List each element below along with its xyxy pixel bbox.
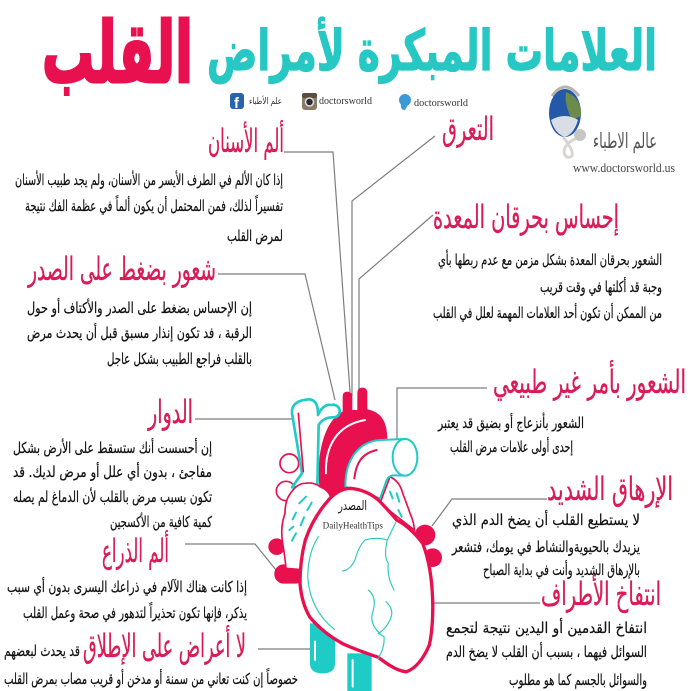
body text [7, 577, 247, 623]
panel: tooth pain [15, 120, 284, 245]
body text: إذا كان الألم في الطرف الأيسر من الأسنان، ولم يجد طبيب الأسنان [15, 170, 283, 190]
right atrium bumpy [380, 477, 414, 530]
body text [437, 412, 584, 456]
illustration: heart [268, 388, 442, 691]
body text: الشعور بأنزعاج أو بضيق قد يعتبر [437, 412, 584, 433]
body text: إن أحسست أنك ستسقط على الأرض بشكل [13, 438, 212, 457]
main ventricles [300, 488, 433, 672]
body text [433, 249, 662, 323]
panel: no symptoms [4, 625, 298, 689]
heading: ألم الأسنان [208, 120, 284, 160]
body text: مفاجئ ، بدون أي علل أو مرض لديك. قد [13, 462, 212, 482]
heading: لا أعراض على الإطلاق [83, 625, 246, 665]
vena cava [292, 399, 340, 487]
social links row [230, 93, 468, 112]
icon: instagram [302, 93, 317, 110]
body text [4, 642, 298, 689]
body text [15, 170, 283, 245]
heading: شعور بضغط على الصدر [27, 250, 216, 288]
facebook name: علم الأطباء [249, 95, 282, 107]
heading: الدوار [147, 393, 193, 431]
source note: DailyHealthTips [323, 521, 383, 531]
body text: خصوصاً إن كنت تعاني من سمنة أو مدخن أو قريب مصاب بمرض القلب [4, 668, 298, 689]
body text: إذا كانت هناك الآلام في ذراعك اليسرى بدون أي سبب [7, 577, 247, 597]
outlined left circles [276, 454, 299, 501]
panel: heartburn [433, 198, 662, 323]
leader lines [185, 136, 547, 649]
panel: dizziness [13, 393, 213, 531]
icon: facebook: f [234, 95, 240, 112]
icon: globe with stethoscope [549, 87, 586, 157]
body text: لا يستطيع القلب أن يضخ الدم الذي [452, 510, 640, 530]
body text [27, 298, 252, 368]
body text: قد يحدث لبعضهم [4, 642, 80, 660]
twitter handle: doctorsworld [414, 97, 468, 109]
coronary lines [308, 523, 396, 658]
icon: twitter [399, 94, 411, 110]
panel: swollen limbs [446, 574, 661, 689]
body text: بالقلب فراجع الطبيب بشكل عاجل [107, 350, 252, 368]
panel: arm pain [7, 530, 247, 623]
red side circles [268, 525, 442, 584]
body text: تكون بسبب مرض بالقلب لأن الدماغ لم يصله [13, 487, 212, 506]
panel: extreme fatigue [451, 470, 673, 580]
logo: doctors world [549, 87, 675, 175]
panel: feeling unusual [437, 360, 686, 456]
pulmonary artery [345, 439, 417, 498]
body text: الرقبة ، فد تكون إنذار مسبق قبل أن يحدث مرض [27, 323, 252, 342]
body text: يذكر، فإنها تكون تحذيراً لتدهور في صحة وعمل القلب [23, 602, 247, 623]
panel: chest pressure [27, 250, 252, 368]
instagram handle: doctorsworld [319, 95, 372, 107]
body text [446, 618, 647, 689]
body text: إن الإحساس بضغط على الصدر والأكتاف أو حول [27, 298, 252, 317]
title: القلب [42, 4, 193, 102]
body text: إحدى أولى علامات مرض القلب [450, 437, 573, 456]
body text: كمية كافية من الأكسجين [110, 512, 213, 531]
heading: التعرق [442, 110, 494, 148]
aortic arch [319, 388, 387, 503]
left atrium bumpy [282, 483, 331, 570]
source note [323, 499, 383, 531]
title [42, 4, 657, 102]
icon: facebook [230, 93, 244, 112]
source note: المصدر [338, 499, 367, 514]
body text: تفسيراً لذلك، فمن المحتمل أن يكون ألماً في عظمة الفك نتيجة [25, 195, 283, 216]
teal lower vessels [310, 623, 372, 691]
heading: ألم الذراع [102, 530, 169, 570]
body text: لمرض القلب [227, 227, 283, 245]
body text: انتفاخ القدمين أو اليدين نتيجة لتجمع [446, 618, 647, 637]
logo url: www.doctorsworld.us [573, 160, 675, 175]
body text [451, 510, 640, 580]
body text [13, 438, 213, 531]
